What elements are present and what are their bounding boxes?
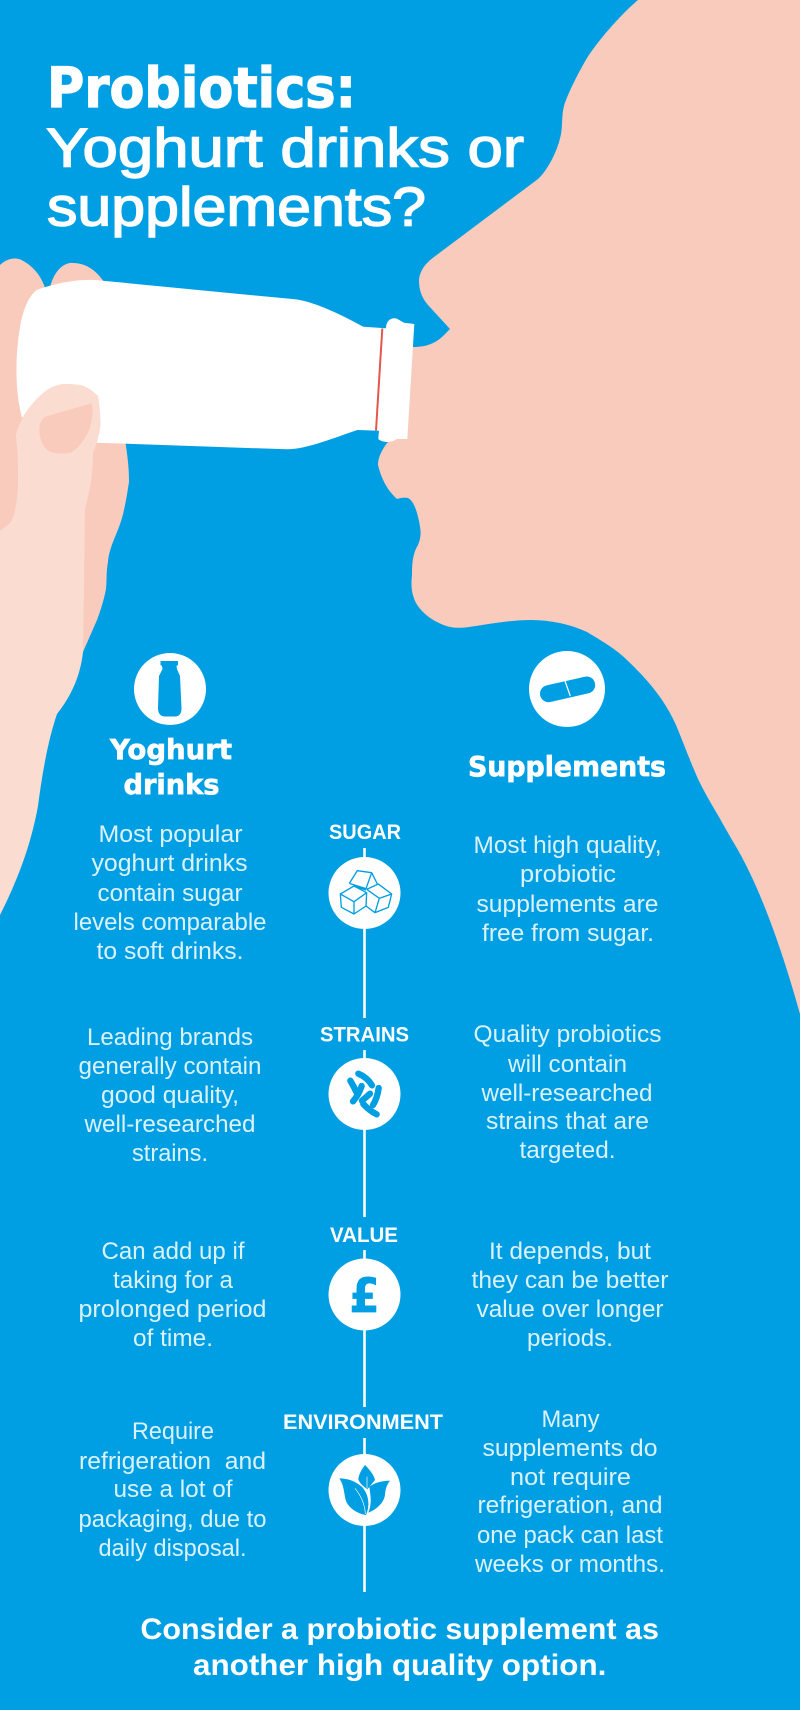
icon: pound sign: £ xyxy=(350,1269,380,1324)
text: yoghurt strains xyxy=(78,1024,262,1167)
label: STRAINS: STRAINS xyxy=(320,1024,409,1047)
text: supplements sugar: probiotic xyxy=(520,861,616,888)
text: yoghurt strains: well-researched xyxy=(84,1111,256,1138)
footer conclusion text: another high quality option. xyxy=(193,1649,606,1682)
title: supplements? xyxy=(47,176,426,238)
icon: sugar cubes xyxy=(328,857,400,929)
label: ENVIRONMENT: ENVIRONMENT xyxy=(283,1411,443,1434)
text: yoghurt sugar: contain sugar xyxy=(98,880,242,907)
text: yoghurt sugar: levels comparable xyxy=(74,909,266,936)
title: Probiotics: xyxy=(47,56,356,120)
illustration: thumb and forearm xyxy=(0,384,101,915)
heading: Yoghurt drinks: Yoghurt xyxy=(109,733,232,766)
text: supplements environment: not require xyxy=(510,1464,631,1491)
text: yoghurt value: prolonged period xyxy=(78,1296,266,1323)
text: supplements environment: Many xyxy=(542,1406,600,1433)
bottle red seal line xyxy=(376,328,382,430)
illustration: thumbnail xyxy=(39,403,93,453)
illustration: yoghurt bottle xyxy=(16,280,414,449)
text: yoghurt environment xyxy=(78,1418,266,1562)
text: supplements environment: supplements do xyxy=(482,1435,658,1462)
text: supplements environment xyxy=(474,1406,665,1578)
icon: yoghurt bottle in circle xyxy=(134,653,206,725)
text: supplements strains: well-researched xyxy=(481,1080,652,1107)
text: supplements value: It depends, but xyxy=(489,1238,651,1265)
title xyxy=(46,56,524,238)
text: yoghurt environment: refrigeration and xyxy=(79,1448,266,1475)
text: yoghurt value xyxy=(78,1238,266,1352)
text: supplements value: periods. xyxy=(527,1325,613,1352)
icon: leaves xyxy=(328,1454,400,1526)
text: supplements strains: strains that are xyxy=(486,1108,649,1135)
text: supplements strains: will contain xyxy=(507,1051,627,1078)
text: supplements strains: Quality probiotics xyxy=(474,1021,662,1048)
text: supplements value xyxy=(472,1238,668,1352)
text: yoghurt sugar: Most popular xyxy=(98,821,242,848)
text: supplements value: they can be better xyxy=(472,1267,668,1294)
text: supplements sugar: Most high quality, xyxy=(474,832,662,859)
text: yoghurt strains: Leading brands xyxy=(87,1024,253,1051)
title: Yoghurt drinks or xyxy=(46,116,524,178)
text: yoghurt sugar xyxy=(74,821,266,965)
text: yoghurt value: Can add up if xyxy=(102,1238,245,1265)
text: yoghurt strains: strains. xyxy=(132,1140,208,1167)
illustration: face profile xyxy=(378,0,800,1014)
text: yoghurt sugar: yoghurt drinks xyxy=(92,850,247,877)
illustration: back fingers of hand xyxy=(0,258,129,660)
label: SUGAR: SUGAR xyxy=(329,821,401,844)
heading: Yoghurt drinks: drinks xyxy=(124,768,220,801)
footer conclusion text xyxy=(140,1613,659,1682)
label: VALUE: VALUE xyxy=(330,1224,398,1247)
text: yoghurt value: taking for a xyxy=(113,1267,233,1294)
text: supplements environment: one pack can last xyxy=(477,1522,663,1549)
text: supplements sugar: free from sugar. xyxy=(482,920,654,947)
heading: Yoghurt drinks xyxy=(109,733,232,801)
text: supplements environment: weeks or months. xyxy=(474,1551,665,1578)
heading: Supplements: Supplements xyxy=(468,750,666,783)
icon: capsule in circle xyxy=(529,651,605,727)
text: yoghurt environment: Require xyxy=(132,1418,214,1445)
text: supplements environment: refrigeration, and xyxy=(478,1492,662,1519)
timeline connector line xyxy=(363,848,366,1592)
text: supplements sugar xyxy=(474,832,662,947)
text: yoghurt environment: use a lot of xyxy=(114,1476,233,1503)
text: supplements sugar: supplements are xyxy=(476,891,658,918)
text: yoghurt strains: good quality, xyxy=(101,1082,239,1109)
text: supplements strains xyxy=(474,1021,662,1164)
text: yoghurt environment: packaging, due to xyxy=(78,1506,266,1533)
text: supplements value: value over longer xyxy=(476,1296,664,1323)
text: yoghurt sugar: to soft drinks. xyxy=(96,938,244,965)
text: yoghurt environment: daily disposal. xyxy=(98,1535,246,1562)
icon: bacteria xyxy=(328,1058,400,1130)
icon: pound sign xyxy=(328,1258,400,1330)
text: yoghurt strains: generally contain xyxy=(78,1053,262,1080)
text: yoghurt value: of time. xyxy=(133,1325,213,1352)
footer conclusion text: Consider a probiotic supplement as xyxy=(140,1613,659,1646)
text: supplements strains: targeted. xyxy=(520,1137,616,1164)
